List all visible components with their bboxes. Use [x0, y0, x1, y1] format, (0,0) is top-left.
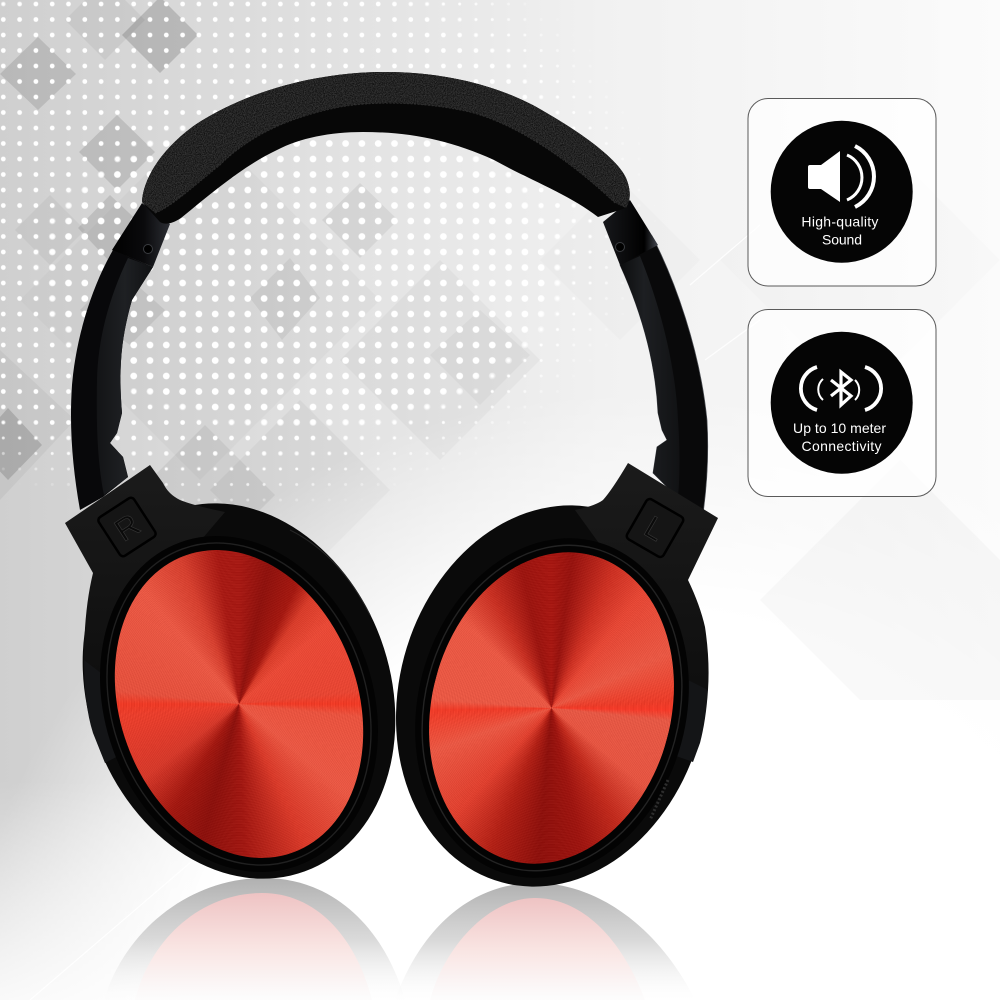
feature card: high-quality sound: [748, 98, 936, 286]
right ear cup red disc: [395, 524, 708, 892]
left arm: [71, 250, 153, 510]
icon: speaker: [808, 146, 874, 207]
headphones: [65, 72, 718, 887]
left slider: [112, 203, 170, 267]
R badge: [97, 496, 157, 558]
right arm: [620, 236, 708, 514]
reflection: left ear cup: [104, 878, 405, 1000]
label: High-quality: [801, 214, 878, 230]
left ear cup red disc: [73, 515, 405, 893]
R badge: R: [108, 507, 146, 548]
feature card: bluetooth connectivity: [748, 309, 936, 497]
left ear cup body: [31, 459, 447, 923]
badge circle: [771, 121, 913, 263]
L badge: L: [639, 509, 671, 548]
halftone dots: [0, 2, 608, 502]
label: Sound: [822, 232, 862, 248]
right ear cup body: [354, 463, 750, 922]
reflection: right ear cup: [395, 883, 695, 1000]
label: Connectivity: [802, 438, 882, 454]
right slider: [603, 200, 658, 265]
badge circle: [771, 332, 913, 474]
headband pad: [142, 72, 630, 224]
L badge: [625, 498, 685, 558]
icon: bluetooth with waves: [801, 367, 881, 410]
label: Up to 10 meter: [793, 420, 886, 436]
